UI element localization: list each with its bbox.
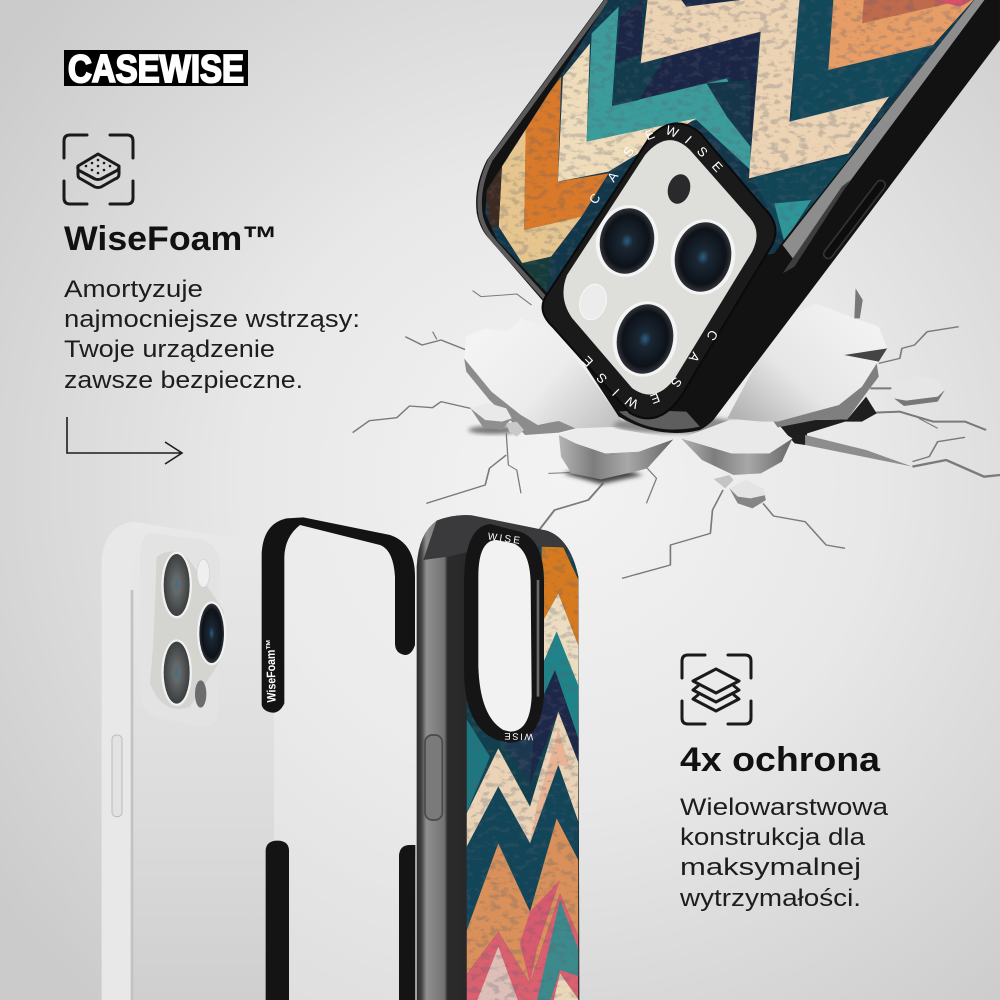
side edge line <box>131 590 133 1000</box>
bump lettering upper: E <box>709 158 726 175</box>
text block: WiseFoam description: Amortyzuje <box>64 276 203 303</box>
lens: upper left <box>589 199 665 283</box>
microphone <box>195 680 206 708</box>
button core <box>828 185 881 254</box>
bump lettering lower: W <box>622 393 641 412</box>
arrow <box>67 417 182 464</box>
dark wedge <box>844 348 887 362</box>
centre left slab top <box>559 428 673 453</box>
bump lettering lower <box>579 327 721 412</box>
lens right <box>197 601 226 665</box>
chevron pattern <box>465 543 580 1000</box>
bump lettering lower: S <box>668 374 685 390</box>
right slab top <box>727 303 887 422</box>
lower foam strip left <box>266 841 289 1000</box>
icon: foam <box>64 135 133 204</box>
hairline cracks <box>353 291 1000 578</box>
centre right slab side <box>681 438 792 475</box>
side button <box>828 185 881 254</box>
case body <box>476 0 1000 433</box>
text block: 4x ochrona description <box>679 794 889 912</box>
bump lettering lower: E <box>579 353 596 370</box>
chevron back pattern <box>470 0 1000 300</box>
text block: 4x ochrona description: konstrukcja dla <box>680 824 866 851</box>
bottom chunks <box>714 475 766 508</box>
crater: front slabs <box>559 420 792 508</box>
bump lettering upper: C <box>586 191 603 207</box>
shadow under slabs <box>563 470 643 484</box>
top rim <box>423 515 578 577</box>
side button <box>425 735 442 820</box>
lens housing <box>150 551 226 709</box>
bump lettering upper: E <box>643 126 657 143</box>
text block: WiseFoam description: zawsze bezpieczne. <box>64 367 303 394</box>
case frame <box>417 515 579 1000</box>
text block: 4x ochrona description: maksymalnej <box>680 854 861 881</box>
microphone <box>664 172 694 206</box>
bump lettering lower: A <box>686 349 703 365</box>
bump lettering upper: I <box>682 133 695 146</box>
centre left slab side <box>559 435 673 479</box>
shard <box>854 288 863 318</box>
camera plate <box>563 140 757 395</box>
crater: large slabs behind the phone <box>353 288 1000 578</box>
bump lettering upper: A <box>604 169 621 185</box>
left slab side <box>464 358 576 435</box>
side button <box>112 735 122 817</box>
top phone: camera module <box>543 122 775 418</box>
bump lettering lower: S <box>593 370 610 387</box>
text block: WiseFoam description <box>64 276 360 394</box>
right rock <box>887 376 945 406</box>
WiseFoam strips <box>262 517 417 1000</box>
bump lettering upper: S <box>620 144 637 160</box>
camera ring <box>464 524 544 743</box>
lower foam strip right <box>399 845 415 1000</box>
pit <box>778 397 877 445</box>
lens bottom <box>161 639 192 706</box>
text block: WiseFoam description: Twoje urządzenie <box>64 336 275 363</box>
side highlight stripe <box>783 0 984 258</box>
bump lettering lower: I <box>609 386 622 399</box>
bump lettering upper <box>586 122 726 207</box>
wedge <box>805 435 912 467</box>
heading: 4x ochrona: 4x ochrona <box>680 741 881 779</box>
phone body <box>102 522 274 1000</box>
open case side view <box>417 515 580 1000</box>
flash <box>197 559 210 587</box>
ring lettering: WISE <box>487 531 523 547</box>
lens: right <box>664 213 742 301</box>
text block: WiseFoam description: najmocniejsze wstrząsy: <box>64 306 360 333</box>
heading: WiseFoam: WiseFoam™ <box>64 220 278 258</box>
left bevel <box>480 0 607 305</box>
lower gloss on side <box>783 180 850 273</box>
phone side strip <box>102 523 132 1000</box>
ring highlight <box>534 580 542 697</box>
top phone: case and pattern <box>470 0 1000 433</box>
left slab top <box>464 318 626 428</box>
ring lettering bottom: WISE <box>503 731 533 742</box>
lens: bottom <box>606 295 684 383</box>
text block: 4x ochrona description: wytrzymałości. <box>679 885 861 912</box>
contact shadow under phone <box>614 416 740 434</box>
bump lettering lower: C <box>704 327 721 343</box>
camera opening <box>478 540 532 732</box>
logo: CASEWISE <box>68 48 244 91</box>
bump lettering upper: W <box>664 122 681 141</box>
camera bump frame <box>543 123 775 418</box>
strip label: WiseFoam™ <box>264 639 279 703</box>
bump lettering lower: E <box>648 390 662 407</box>
right slab side <box>774 363 879 427</box>
top foam strip <box>262 517 415 713</box>
flash <box>576 281 610 323</box>
clear corner <box>619 410 700 430</box>
clear panel <box>274 530 417 1000</box>
camera plateau <box>140 533 220 727</box>
bump lettering upper: S <box>694 143 711 160</box>
centre right slab top <box>681 420 792 453</box>
worn texture <box>486 0 970 292</box>
text block: 4x ochrona description: Wielowarstwowa <box>680 794 889 821</box>
clear back phone <box>102 522 274 1000</box>
small left chunks <box>468 403 524 437</box>
icon: layers <box>682 655 751 724</box>
lens top <box>161 552 192 618</box>
